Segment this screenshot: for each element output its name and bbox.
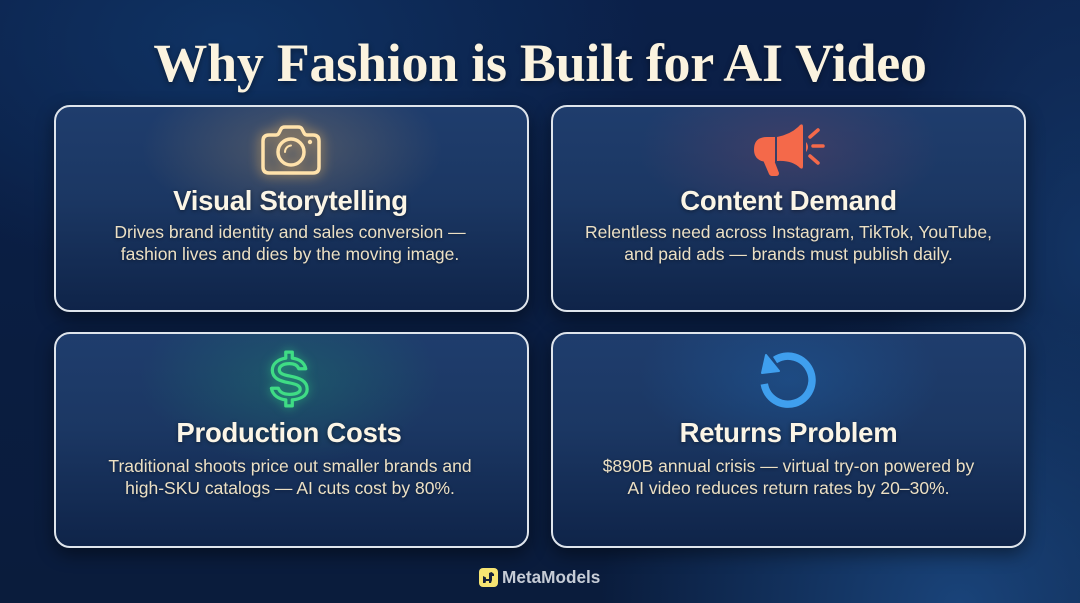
icon: logo mark	[479, 568, 498, 587]
heading: Production Costs	[176, 417, 402, 448]
text block: $890B annual crisis — virtual try-on powered by	[603, 456, 974, 476]
text block: AI video reduces return rates by 20–30%.	[628, 478, 950, 498]
text block	[108, 456, 472, 499]
text block: and paid ads — brands must publish daily.	[624, 244, 953, 264]
text block	[603, 456, 974, 498]
heading: Content Demand	[680, 185, 897, 216]
logo: MetaModels	[479, 567, 600, 587]
text block: fashion lives and dies by the moving image.	[121, 244, 459, 264]
brand name: MetaModels	[502, 567, 600, 587]
panel: production costs	[54, 332, 529, 548]
heading: Visual Storytelling	[173, 185, 408, 216]
text block: Drives brand identity and sales conversion —	[114, 222, 466, 242]
icon: dollar sign	[266, 346, 313, 412]
title: Why Fashion is Built for AI Video	[153, 33, 927, 93]
panel: content demand	[551, 105, 1026, 312]
text block: high-SKU catalogs — AI cuts cost by 80%.	[125, 478, 455, 498]
text block: Traditional shoots price out smaller brands and	[108, 456, 472, 476]
text block	[585, 222, 992, 264]
icon: camera	[252, 116, 330, 184]
text block	[114, 222, 466, 265]
heading: Returns Problem	[680, 417, 897, 448]
text block: Relentless need across Instagram, TikTok, YouTube,	[585, 222, 992, 242]
icon: megaphone	[754, 124, 825, 176]
icon: return arrow	[760, 352, 816, 408]
panel: visual storytelling	[54, 105, 529, 312]
panel: returns problem	[551, 332, 1026, 548]
